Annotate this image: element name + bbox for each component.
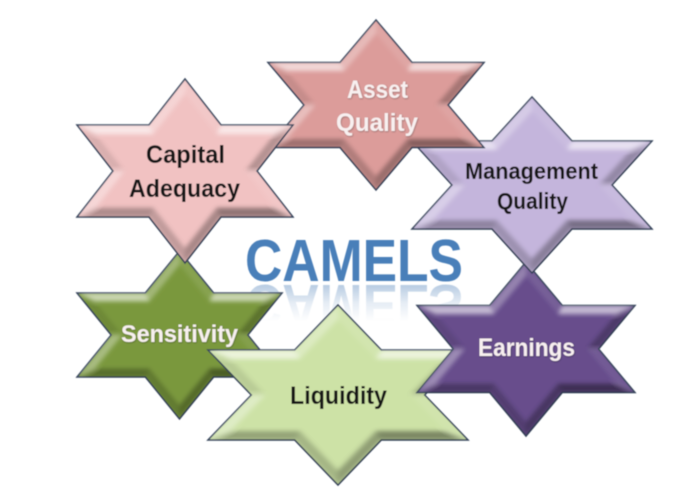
- star: Capital Adequacy: Capital: [146, 141, 225, 169]
- star: Asset Quality: [268, 20, 484, 190]
- star: Asset Quality: Quality: [336, 109, 418, 137]
- star: Sensitivity: Sensitivity: [121, 321, 239, 348]
- star: Sensitivity: [77, 251, 282, 419]
- star: Earnings: Earnings: [478, 334, 575, 362]
- star: Management Quality: [412, 97, 652, 273]
- star: Asset Quality: Asset: [347, 76, 409, 104]
- star: Liquidity: Liquidity: [290, 382, 387, 410]
- star: Management Quality: Management: [465, 158, 598, 184]
- infographic: CAMELS stars: [75, 18, 654, 487]
- star: Capital Adequacy: [77, 79, 293, 263]
- title: CAMELS with reflection: [245, 228, 463, 338]
- star: Earnings: [417, 262, 635, 436]
- star: Capital Adequacy: Adequacy: [129, 175, 240, 203]
- star: Management Quality: Quality: [497, 188, 568, 214]
- title: CAMELS with reflection: CAMELS: [245, 272, 463, 338]
- title: CAMELS with reflection: CAMELS: [245, 228, 463, 294]
- star: Liquidity: [208, 305, 468, 485]
